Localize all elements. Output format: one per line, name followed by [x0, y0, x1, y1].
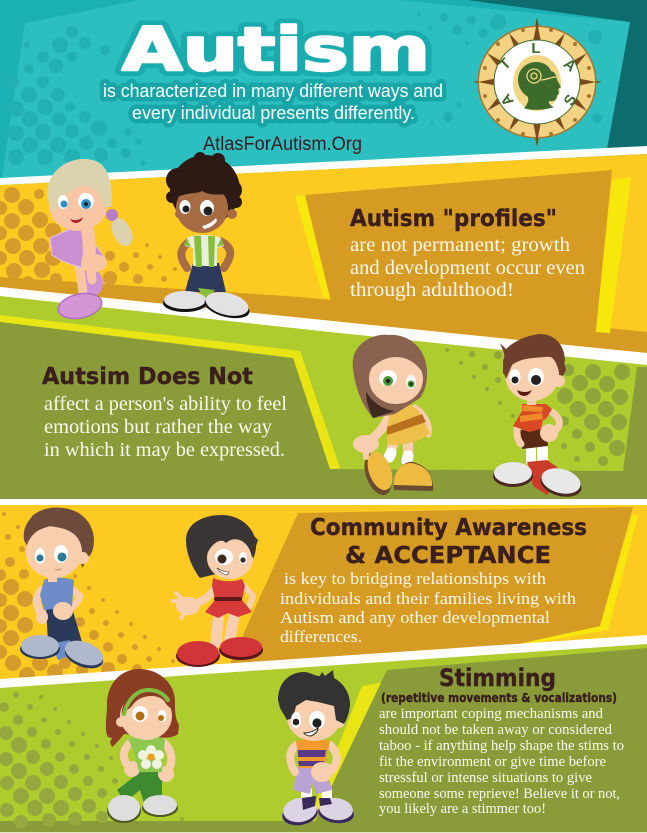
text block: does not	[44, 393, 287, 461]
character: black hair girl	[173, 515, 263, 667]
band four halftone dots	[0, 692, 184, 821]
text block: does not: in which it may be expressed.	[44, 439, 285, 461]
band two halftone dots	[445, 348, 630, 466]
band three halftone dots	[0, 512, 175, 683]
character: curly hair boy	[163, 152, 252, 322]
icon: head spiral	[527, 69, 559, 83]
text block: stimming: stressful or intense situations to give	[379, 770, 592, 786]
subtitle	[103, 81, 443, 123]
text block: profiles: through adulthood!	[350, 279, 514, 301]
panel: autism does not card	[0, 322, 647, 499]
text block: stimming: are important coping mechanisms and	[379, 706, 603, 722]
divider stripe: header to yellow	[0, 146, 647, 185]
panel: community awareness card	[228, 507, 633, 668]
text block: profiles: and development occur even	[350, 257, 585, 279]
header halftone dots	[5, 12, 602, 166]
logo letters: S	[561, 92, 580, 109]
character: red shirt boy	[493, 334, 584, 501]
title: Autism: Autism	[122, 15, 430, 85]
text block: stimming: fit the environment or give time before	[379, 754, 606, 770]
text block: profiles	[350, 234, 585, 301]
heading: community awareness and acceptance: Community Awareness	[310, 515, 587, 541]
subtitle: every individual presents differently.	[132, 103, 415, 123]
logo letters: T	[496, 55, 515, 74]
divider stripe: yellow to green lower	[0, 635, 647, 688]
text block: community: Autism and any other developmental	[280, 608, 550, 627]
logo letters: A	[560, 55, 579, 75]
subtitle: is characterized in many different ways and	[103, 81, 443, 101]
text block: community: individuals and their families living with	[280, 589, 577, 608]
panel: stimming card	[0, 648, 647, 833]
panel: autism profiles card	[305, 170, 612, 340]
text block: does not: emotions but rather the way	[44, 416, 272, 438]
title: Autism: Autism	[122, 15, 430, 85]
text block: stimming: taboo - if anything help shape the stims to	[379, 738, 624, 754]
text block: stimming	[379, 706, 624, 817]
heading: autsim does not: Autsim Does Not	[42, 364, 253, 390]
text block: profiles: are not permanent; growth	[350, 234, 570, 256]
website link: AtlasForAutism.Org	[203, 134, 362, 155]
text block: stimming: should not be taken away or considered	[379, 722, 612, 738]
text block: community: differences.	[280, 627, 362, 646]
character: blue shirt boy	[20, 508, 107, 673]
panel: green band four	[0, 644, 647, 833]
character: brown hair girl	[353, 335, 433, 499]
logo letters: A	[497, 90, 517, 109]
heading: community awareness and acceptance: & ACCEPTANCE	[345, 543, 551, 569]
heading: stimming: Stimming	[439, 664, 556, 692]
character: red hair girl	[106, 669, 179, 823]
icon: head silhouette	[518, 62, 561, 110]
logo letters: L	[531, 40, 541, 57]
divider stripe: white	[0, 499, 647, 505]
subtitle: every individual presents differently.	[132, 103, 415, 123]
character: blonde girl	[47, 159, 136, 322]
logo letters	[496, 40, 580, 109]
character: black hair boy	[278, 670, 355, 828]
panel: header banner	[0, 0, 647, 190]
panel: yellow band three	[0, 505, 647, 683]
panel: yellow band one	[0, 154, 647, 353]
heading: community awareness and acceptance	[310, 515, 587, 569]
text block: stimming: you likely are a stimmer too!	[379, 801, 546, 817]
text block: stimming: someone some reprieve! Believe it or not,	[379, 786, 620, 802]
subtitle: is characterized in many different ways and	[103, 81, 443, 101]
heading: autism profiles: Autism "profiles"	[350, 206, 557, 232]
band one halftone dots	[0, 187, 191, 288]
text block: community	[280, 569, 577, 646]
text block: community: is key to bridging relationships with	[284, 569, 547, 588]
icon: atlas compass logo	[473, 17, 602, 147]
panel: green band two	[0, 296, 647, 499]
divider stripe: yellow to green	[0, 287, 647, 365]
text block: does not: affect a person's ability to feel	[44, 393, 287, 415]
